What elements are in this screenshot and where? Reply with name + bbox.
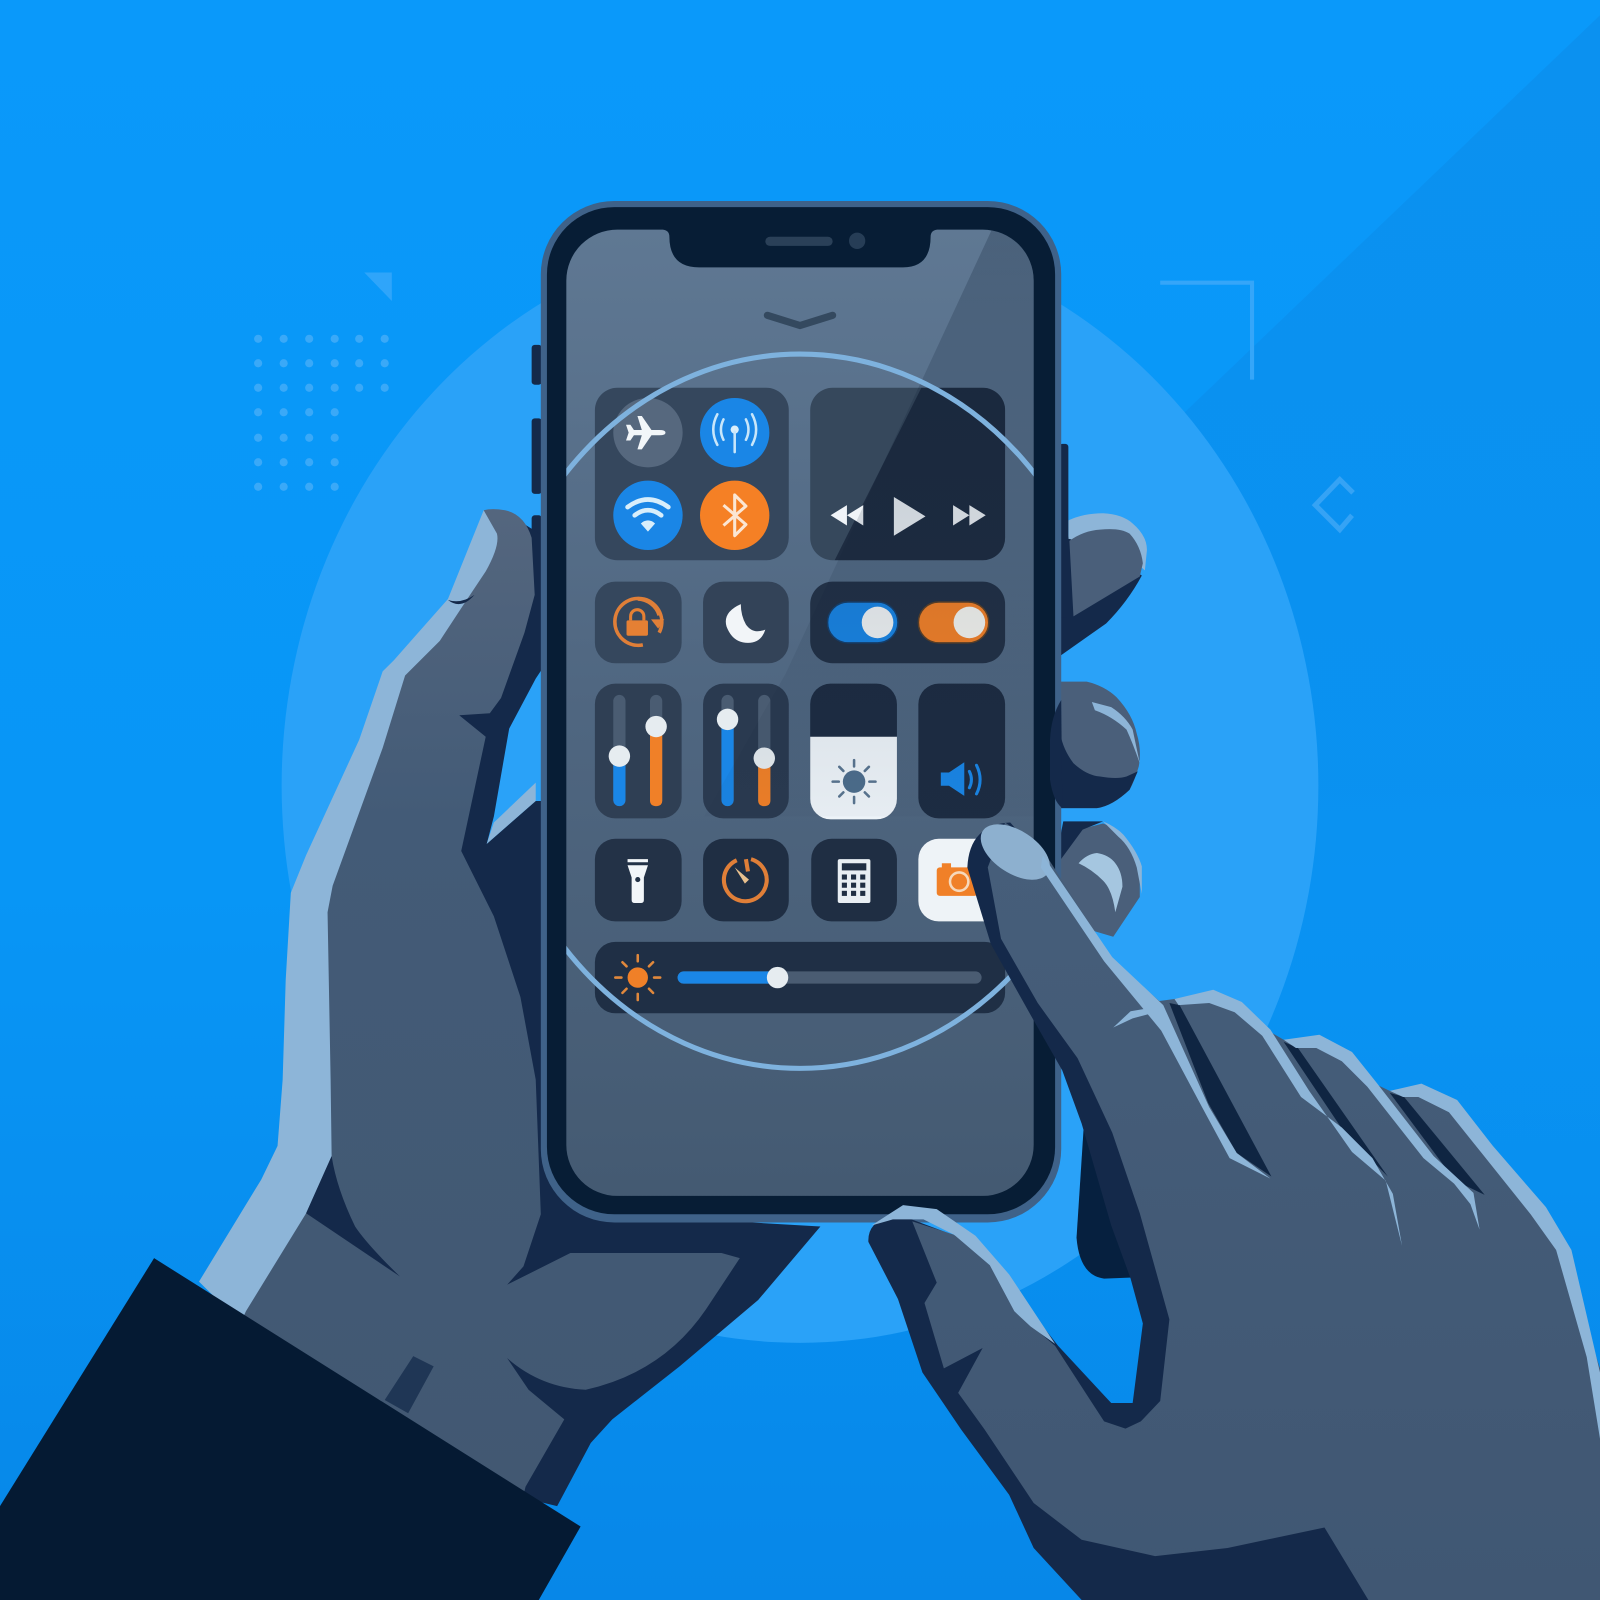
phone notch (663, 224, 937, 267)
decoration: triangle (364, 272, 392, 301)
brightness knob (767, 967, 788, 988)
left hand wrist mark (385, 1356, 434, 1413)
right hand skin (912, 822, 1600, 1600)
right hand shadow layer (868, 822, 1429, 1600)
tile: toggles (810, 582, 1005, 663)
finger two shadow on frame (1050, 700, 1062, 808)
brightness track (678, 971, 982, 984)
tile: timer (703, 839, 789, 921)
index finger rim (1041, 855, 1270, 1179)
tile: sliders B (703, 684, 789, 818)
icon: fast forward (953, 505, 986, 526)
icon: cellular antenna (700, 398, 769, 467)
highlight ring (566, 352, 1034, 1071)
tile: brightness (810, 684, 897, 819)
tile: camera (918, 839, 1005, 921)
phone side buttons (532, 345, 1068, 617)
control centre tiles (595, 388, 1005, 1013)
left hand (199, 509, 820, 1531)
phone speaker (765, 237, 833, 246)
middle finger rim (1174, 990, 1402, 1246)
tile: volume (918, 684, 1005, 818)
tile: rotation lock (595, 582, 682, 663)
decoration: open diamond (1315, 480, 1353, 530)
back finger one (1051, 513, 1147, 655)
ring finger rim (1284, 1035, 1480, 1230)
back finger shadow blob (1077, 1128, 1133, 1279)
finger gap: ring-pinky (1390, 1093, 1485, 1195)
left hand thumb crease (448, 595, 474, 604)
icon: play (894, 497, 926, 536)
phone (541, 201, 1062, 1222)
left hand skin (230, 509, 740, 1531)
finger gap: middle-ring (1284, 1042, 1388, 1177)
sleeve (0, 1258, 581, 1600)
tile: calculator (811, 839, 897, 921)
finger gap: index-middle (1169, 1003, 1271, 1177)
icon: airplane mode (613, 398, 683, 467)
tile: flashlight (595, 839, 682, 921)
screen glare shade (704, 230, 1034, 816)
back fingers behind phone (1051, 513, 1147, 937)
pinky rim (1390, 1084, 1600, 1439)
icon: rewind (831, 505, 863, 526)
tile: do not disturb (703, 582, 789, 663)
decoration: dot grid (254, 335, 389, 491)
icon: wifi (613, 481, 683, 550)
toggle: blue (828, 602, 898, 643)
panel: connectivity (595, 388, 789, 560)
toggle: orange (918, 602, 989, 643)
phone screen (566, 230, 1034, 1196)
background diagonal panel (1184, 15, 1600, 1276)
decoration: corner bracket (1160, 283, 1252, 380)
back finger two (1051, 682, 1140, 808)
fingertip nail (971, 813, 1059, 891)
phone bezel (547, 207, 1055, 1214)
right hand (868, 813, 1600, 1600)
phone camera (849, 233, 865, 249)
swipe chevron (767, 315, 833, 326)
panel: brightness bar (595, 942, 1005, 1013)
panel: media player (810, 388, 1005, 560)
left hand shadow layer (327, 515, 820, 1506)
media panel shaded half (835, 388, 1005, 560)
index finger crease (1113, 1007, 1163, 1028)
left hand palm wedge (306, 1156, 400, 1277)
thumb rim (871, 1205, 1055, 1344)
icon: bluetooth (700, 481, 769, 550)
background large circle (282, 229, 1318, 1343)
tile: sliders A (595, 684, 682, 818)
phone frame (541, 201, 1061, 1222)
icon: orange sun (615, 955, 660, 1000)
left hand gap highlight (487, 783, 536, 844)
brightness fill (678, 971, 778, 984)
left hand light rim (199, 510, 505, 1347)
back finger three (1051, 821, 1142, 937)
